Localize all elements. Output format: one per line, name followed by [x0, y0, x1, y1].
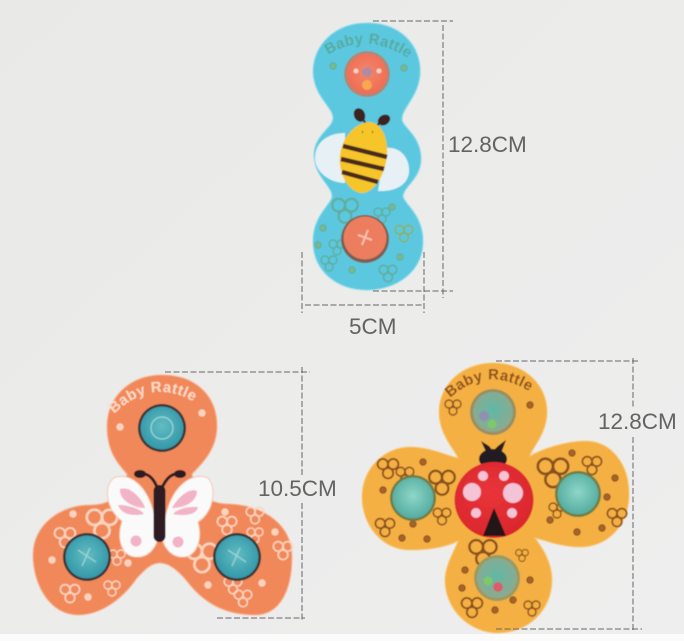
label: yellow height: 12.8CM [598, 409, 677, 434]
blue spinner decorations [315, 63, 413, 282]
label: Baby Rattle on blue spinner: Baby Rattle [324, 33, 411, 58]
orange spinner height dimension [165, 367, 310, 620]
yellow spinner decorations [375, 400, 627, 617]
icon: butterfly [107, 470, 213, 557]
label: Baby Rattle on yellow spinner: Baby Rattle [444, 368, 532, 398]
bottom yellow spinner ball [474, 555, 520, 601]
yellow spinner height dimension [496, 358, 642, 630]
orange spinner decorations [49, 410, 293, 607]
icon: ladybug [454, 440, 534, 538]
blue spinner with bee [312, 22, 424, 291]
yellow spinner with ladybug [360, 362, 630, 634]
label: Baby Rattle on orange spinner: Baby Rattle [108, 381, 196, 414]
label: blue height: 12.8CM [448, 132, 527, 157]
top yellow spinner ball [470, 389, 516, 435]
right yellow spinner ball [555, 471, 601, 517]
yellow spinner body [362, 363, 629, 633]
orange spinner body [33, 375, 292, 615]
bee wings [315, 133, 409, 191]
top blue spinner ball [344, 51, 390, 97]
icon: bee [340, 106, 392, 193]
blue spinner height dimension [373, 21, 453, 298]
label: blue width: 5CM [349, 314, 397, 339]
left orange spinner ball [63, 533, 111, 581]
top orange spinner ball [138, 404, 186, 452]
blue spinner body [313, 23, 423, 290]
orange spinner with butterfly [32, 374, 294, 616]
label: orange height: 10.5CM [258, 476, 337, 501]
blue spinner width dimension [302, 252, 424, 313]
bottom blue spinner ball [341, 215, 389, 263]
left yellow spinner ball [390, 475, 436, 521]
right orange spinner ball [213, 533, 261, 581]
